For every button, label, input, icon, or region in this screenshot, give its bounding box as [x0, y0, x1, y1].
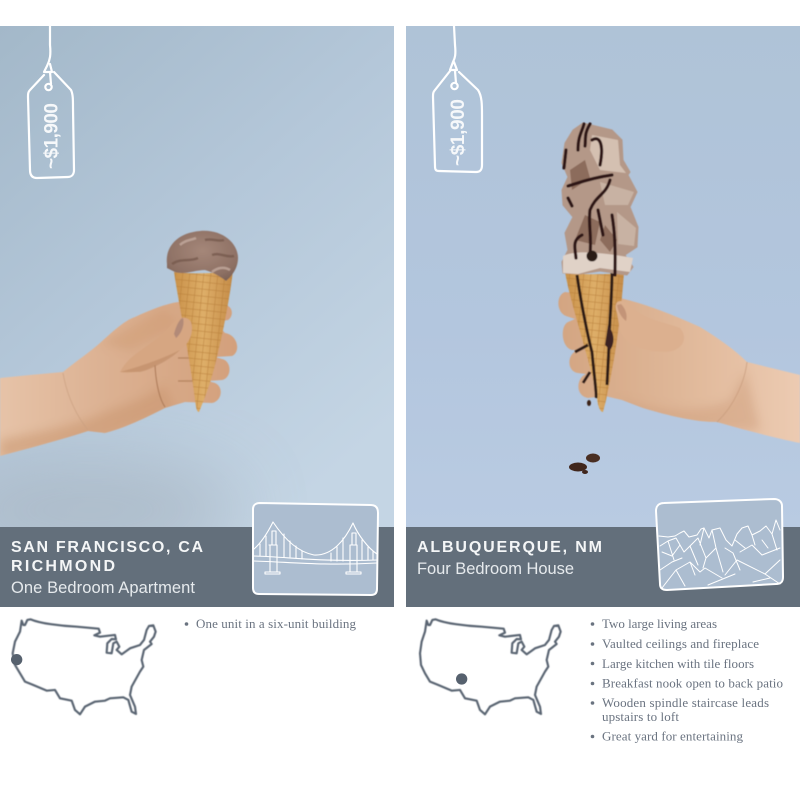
- bullet list: right: Breakfast nook open to back patio: [602, 676, 783, 690]
- photo background: left: [0, 26, 394, 560]
- bullet list: right: Large kitchen with tile floors: [602, 656, 754, 671]
- heading: San Francisco, CA Richmond: RICHMOND: [11, 558, 115, 575]
- icon: mountains: [656, 499, 783, 590]
- price tag: right: ~$1,900: [448, 99, 469, 166]
- bullet list: right: upstairs to loft: [602, 709, 679, 724]
- bullet list: right: Vaulted ceilings and fireplace: [602, 636, 759, 651]
- chocolate drips on the ground: [569, 454, 600, 474]
- bullet list: left: One unit in a six-unit building: [196, 616, 356, 631]
- price tag: left: [28, 26, 74, 178]
- bullet list: right: Great yard for entertaining: [602, 728, 744, 744]
- heading: San Francisco, CA Richmond: [11, 539, 203, 575]
- photo background: right: [406, 26, 800, 527]
- panel: Albuquerque: [406, 26, 800, 744]
- subheading: one bedroom: One Bedroom Apartment: [11, 579, 195, 597]
- bullet list: right: Two large living areas: [602, 616, 717, 631]
- map: US with Albuquerque marker: [420, 619, 561, 714]
- bullet list: right: [591, 616, 783, 744]
- price tag: right: [433, 26, 482, 172]
- subheading: four bedroom: Four Bedroom House: [417, 560, 574, 578]
- price tag: left: ~$1,900: [42, 103, 62, 169]
- icon: Golden Gate Bridge: [253, 503, 378, 595]
- info band: right: [406, 527, 800, 607]
- info band: left: [0, 527, 394, 607]
- bullet list: right: Wooden spindle staircase leads: [602, 695, 769, 710]
- photo: hand holding four-scoop melting cone: [558, 123, 800, 443]
- photo: hand holding single scoop cone: [0, 231, 238, 460]
- heading: San Francisco, CA Richmond: SAN FRANCISCO, CA: [11, 539, 203, 556]
- heading: Albuquerque, NM: ALBUQUERQUE, NM: [417, 539, 602, 556]
- panel: San Francisco: [0, 26, 394, 714]
- map: US with San Francisco marker: [11, 619, 156, 714]
